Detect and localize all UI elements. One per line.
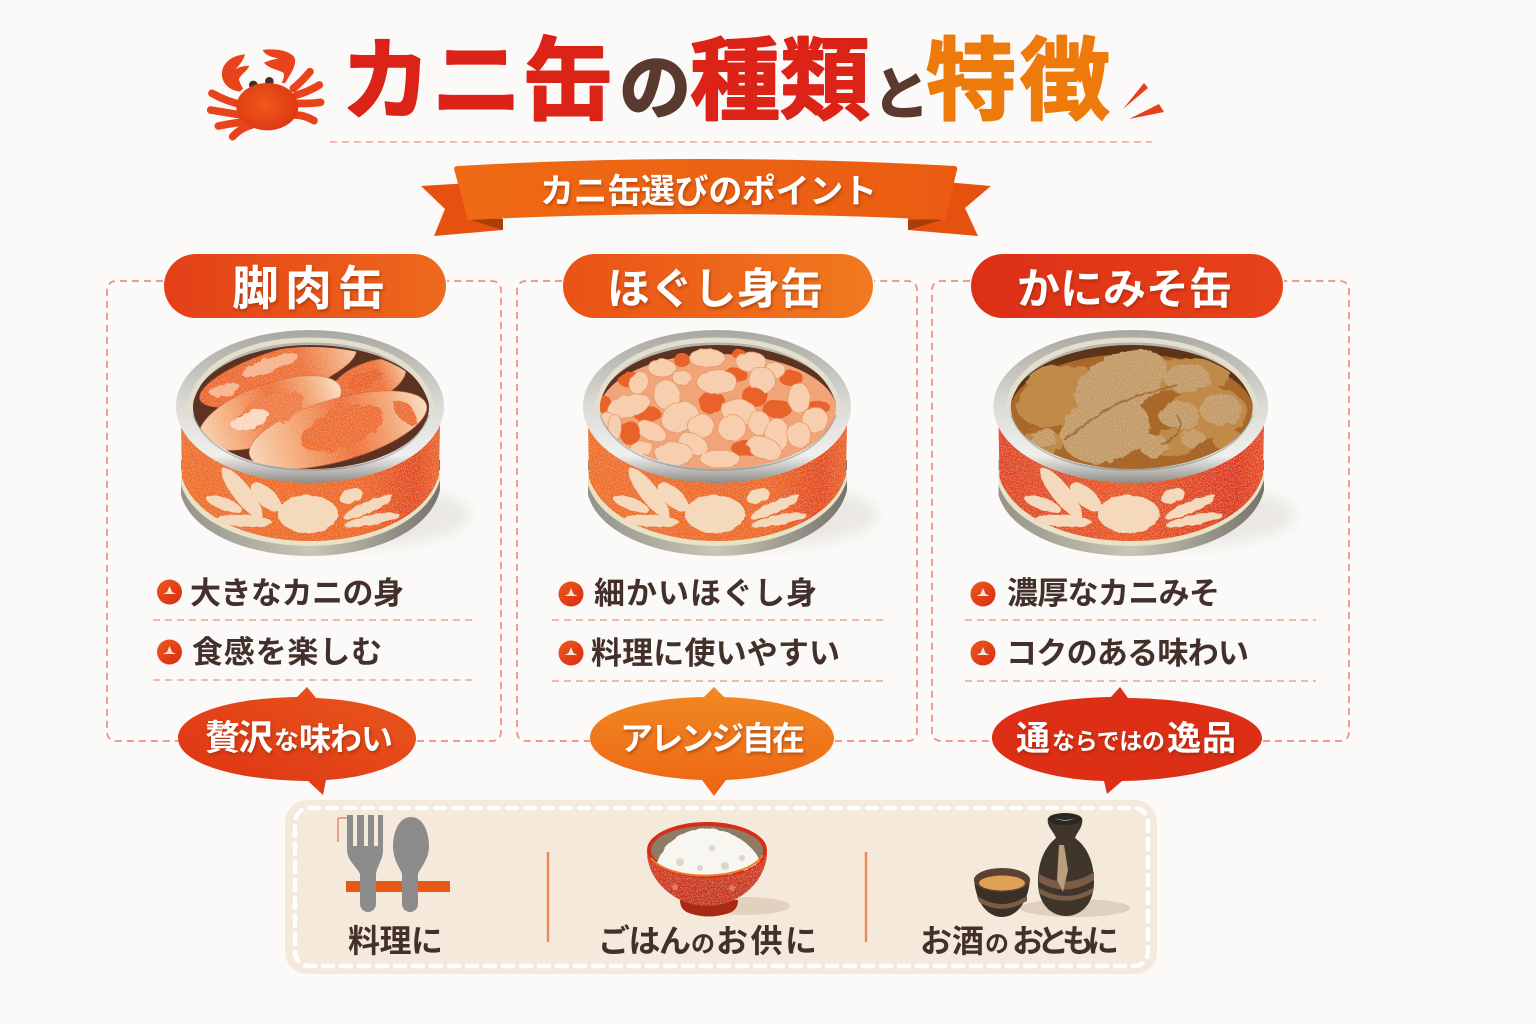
panel: pairing suggestions	[285, 800, 1157, 974]
bullet icon	[970, 640, 996, 666]
title	[341, 32, 1110, 132]
feature list 2: 料理に使いやすい	[591, 636, 840, 671]
feature list 1	[153, 576, 476, 680]
callout 3: 逸品	[1167, 720, 1236, 758]
label: ごはんのお供に: の	[691, 931, 715, 958]
ribbon heading: カニ缶選びのポイント	[540, 173, 877, 211]
feature list 2: 細かいほぐし身	[594, 576, 817, 611]
icon: title burst	[1123, 83, 1164, 119]
label: お酒のおともに	[920, 923, 1119, 959]
icon: rice bowl	[647, 822, 790, 916]
callout 1: な	[274, 727, 299, 755]
bullet icon	[970, 582, 996, 606]
label: お酒のおともに: おともに	[1012, 923, 1119, 959]
can: crab miso	[993, 330, 1295, 556]
heading pill 1	[164, 254, 446, 318]
heading pill 2: ほぐし身缶	[607, 266, 823, 314]
label: ごはんのお供に: お供に	[716, 923, 817, 959]
can: leg meat	[176, 327, 470, 556]
bullet icon	[157, 640, 182, 664]
title underline	[330, 141, 1152, 143]
label: お酒のおともに: お酒	[920, 923, 984, 959]
heading pill 2	[563, 254, 873, 318]
title: 特徴	[926, 32, 1110, 132]
callout 3: ならではの	[1052, 728, 1165, 754]
title: と	[873, 63, 929, 126]
panel: ほぐし身缶	[517, 254, 917, 796]
icon: sake set	[974, 813, 1130, 917]
callout 2: アレンジ自在	[620, 720, 805, 757]
panel: かにみそ缶	[932, 254, 1349, 794]
feature list 1: 大きなカニの身	[190, 576, 404, 611]
label: 料理に: 料理に	[348, 923, 443, 959]
panel: 脚肉缶	[107, 254, 501, 795]
feature list 3	[965, 576, 1316, 681]
panel frame 1	[107, 281, 501, 741]
bullet icon	[157, 580, 182, 604]
heading pill 1: 脚肉缶	[232, 262, 385, 315]
label: ごはんのお供に: ごはん	[598, 923, 691, 959]
icon: cutlery	[338, 815, 450, 912]
callout 1: 味わい	[299, 721, 393, 757]
title: カニ缶	[341, 32, 613, 132]
callout 2	[590, 687, 834, 796]
feature list 3: 濃厚なカニみそ	[1007, 576, 1220, 611]
heading pill 3	[971, 254, 1283, 318]
panel frame 2	[517, 281, 917, 741]
can: flaked meat	[583, 330, 877, 556]
callout 3: 通	[1016, 720, 1050, 758]
title: の	[619, 49, 691, 129]
feature list 1: 食感を楽しむ	[192, 635, 382, 670]
callout 1	[178, 687, 416, 795]
callout 3	[992, 687, 1262, 794]
bullet icon	[558, 582, 584, 606]
label: ごはんのお供に	[598, 923, 817, 959]
bullet icon	[558, 640, 584, 666]
panel frame 3	[932, 281, 1349, 741]
label: お酒のおともに: の	[985, 931, 1009, 958]
title: 種類	[690, 32, 870, 132]
callout 1: 贅沢	[205, 719, 273, 758]
heading pill 3: かにみそ缶	[1017, 266, 1232, 314]
feature list 2	[552, 576, 888, 681]
feature list 3: コクのある味わい	[1006, 636, 1249, 671]
ribbon heading	[421, 159, 991, 236]
icon: crab	[211, 49, 321, 137]
